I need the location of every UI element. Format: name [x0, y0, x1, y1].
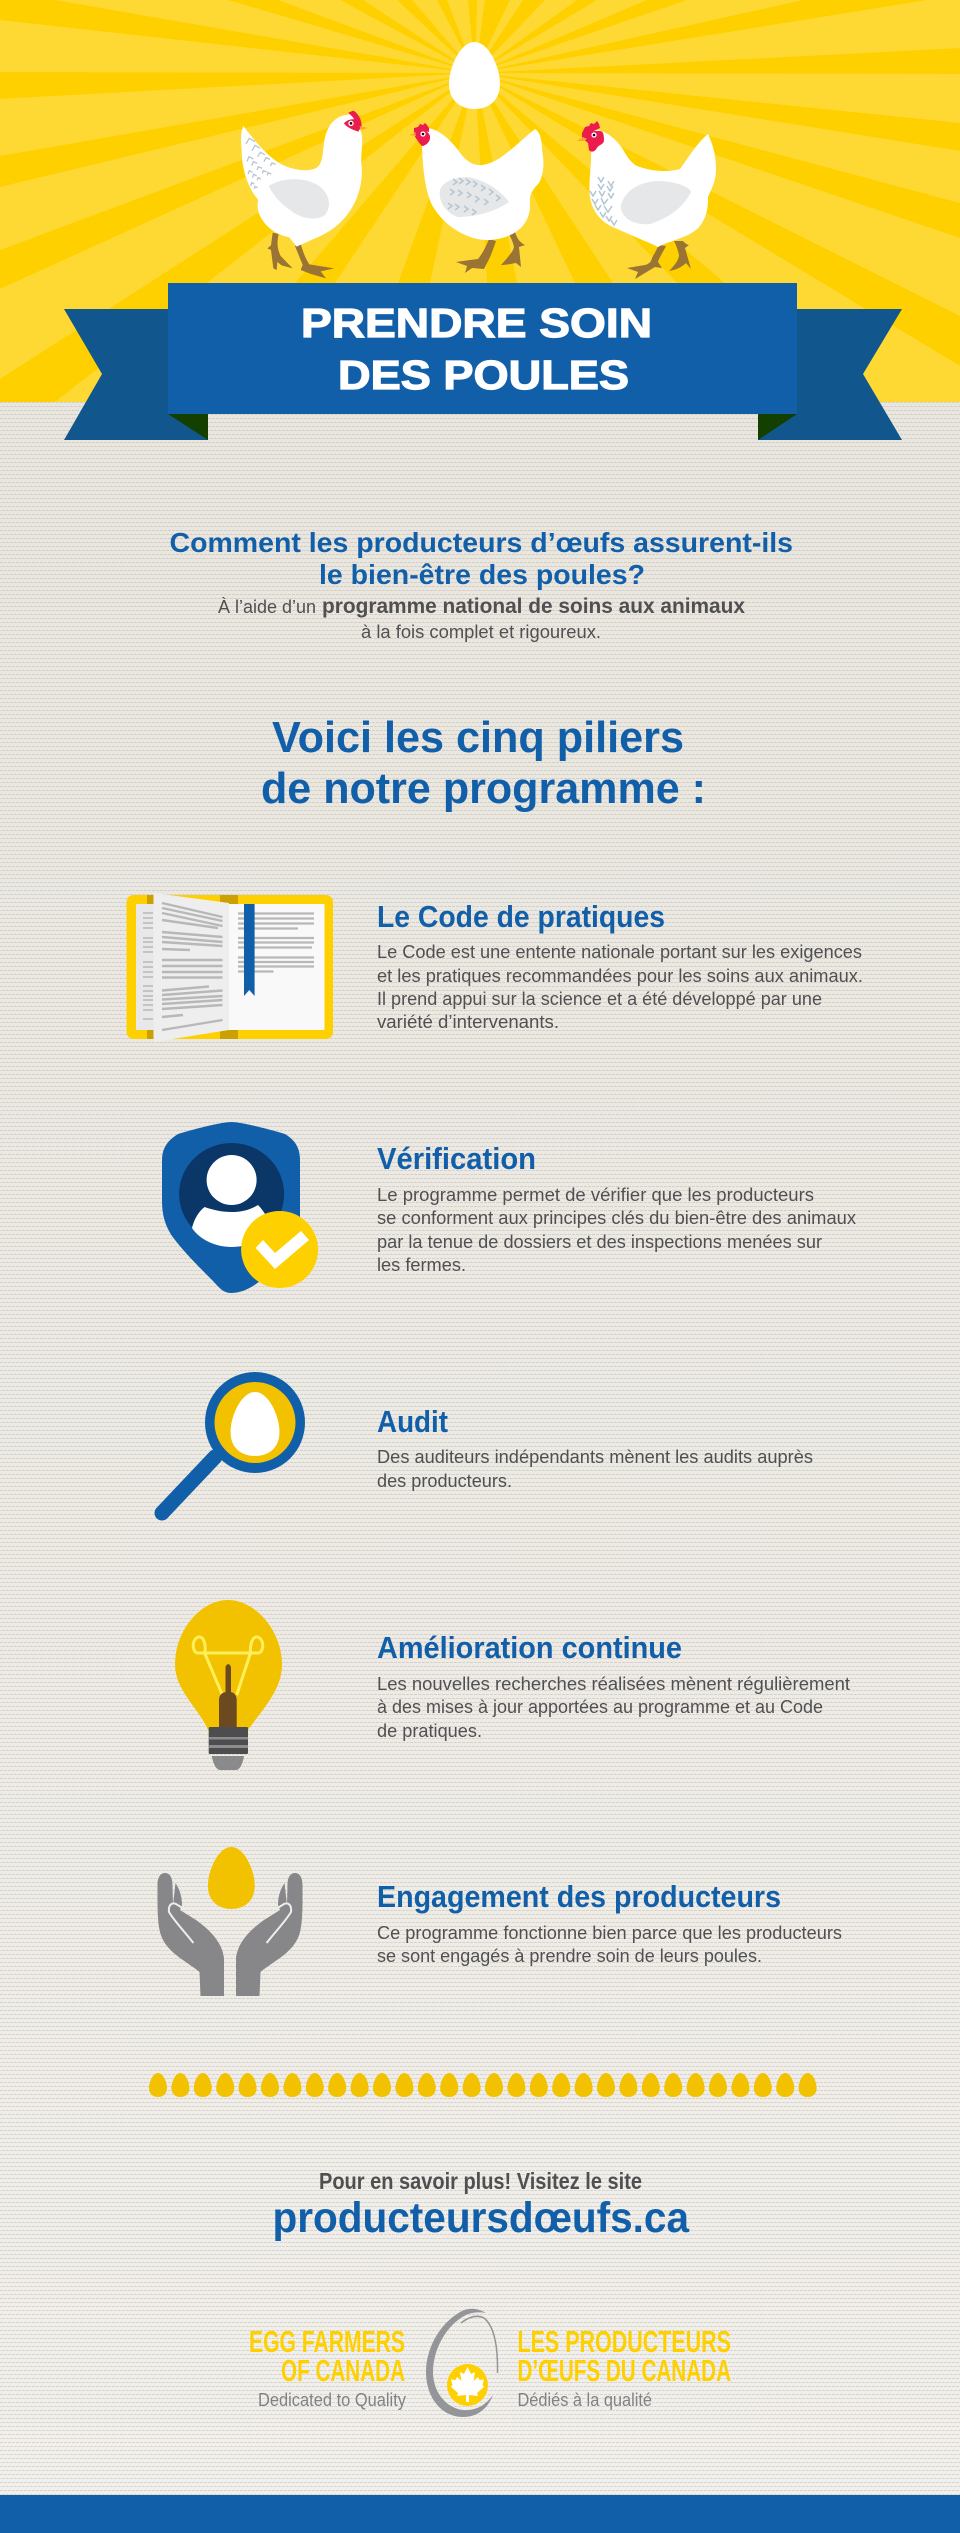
icon: magnifying glass [162, 1372, 305, 1513]
pillar 5 text [377, 1879, 842, 1966]
pillar 1 text: Le Code de pratiques [377, 899, 665, 934]
pillar 3 text: Des auditeurs indépendants mènent les audits auprès [377, 1446, 813, 1467]
pillar 2 text: se conforment aux principes clés du bien-être des animaux [377, 1207, 857, 1228]
call to action: Pour en savoir plus! Visitez le site [319, 2168, 642, 2194]
logo text: English [249, 2324, 407, 2410]
illustration: hen centre [409, 123, 543, 273]
heading: five pillars: de notre programme : [261, 764, 706, 813]
logo text: French: Dédiés à la qualité [518, 2389, 652, 2410]
pillar 4 text: Amélioration continue [377, 1630, 682, 1665]
title: DES POULES [338, 352, 629, 398]
intro answer: à la fois complet et rigoureux. [361, 622, 601, 642]
icon: light bulb [175, 1600, 282, 1770]
intro answer: À l’aide d’un [218, 596, 316, 617]
title: PRENDRE SOIN [301, 300, 652, 346]
pillar 3 text [377, 1404, 813, 1491]
pillar 4 text: Les nouvelles recherches réalisées mènent régulièrement [377, 1673, 850, 1694]
pillar 1 text: variété d’intervenants. [377, 1011, 559, 1032]
heading: five pillars: Voici les cinq piliers [272, 713, 684, 762]
intro question: le bien-être des poules? [319, 559, 645, 590]
pillar 2 text [377, 1141, 857, 1275]
pillar 5 text: se sont engagés à prendre soin de leurs poules. [377, 1945, 762, 1966]
row of yellow eggs [149, 2073, 817, 2097]
icon: open book [126, 893, 333, 1042]
pillar 4 text: de pratiques. [377, 1720, 482, 1741]
pillar 2 text: Le programme permet de vérifier que les producteurs [377, 1184, 814, 1205]
logo: egg with maple leaf [426, 2309, 498, 2417]
intro question: Comment les producteurs d’œufs assurent-ils [170, 527, 793, 558]
icon: hands holding egg [157, 1847, 303, 1996]
heading: five pillars [261, 713, 706, 813]
icon: white egg in sunburst [449, 42, 500, 109]
pillar 1 text: et les pratiques recommandées pour les soins aux animaux. [377, 965, 863, 986]
pillar 2 text: Vérification [377, 1141, 536, 1176]
pillar 3 text: des producteurs. [377, 1470, 512, 1491]
pillar 5 text: Ce programme fonctionne bien parce que les producteurs [377, 1922, 842, 1943]
pillar 3 text: Audit [377, 1404, 448, 1439]
pillar 4 text: à des mises à jour apportées au programme et au Code [377, 1696, 823, 1717]
call to action: producteursdœufs.ca [272, 2194, 690, 2242]
title [301, 300, 652, 398]
logo text: English: Dedicated to Quality [258, 2389, 407, 2410]
pillar 1 text: Le Code est une entente nationale portant sur les exigences [377, 941, 862, 962]
pillar 1 text [377, 899, 863, 1032]
logo text: French [518, 2324, 731, 2410]
footer band [0, 2495, 960, 2533]
illustration: hen right [577, 121, 716, 279]
pillar 2 text: par la tenue de dossiers et des inspections menées sur [377, 1231, 822, 1252]
illustration: hen left [241, 111, 368, 278]
call to action [272, 2168, 690, 2242]
pillar 1 text: Il prend appui sur la science et a été développé par une [377, 988, 822, 1009]
icon: verification shield [162, 1122, 318, 1293]
logo text: English: EGG FARMERS [249, 2324, 405, 2359]
intro answer [218, 595, 745, 642]
logo text: French: D’ŒUFS DU CANADA [518, 2353, 731, 2388]
logo text: English: OF CANADA [281, 2353, 405, 2388]
logo text: French: LES PRODUCTEURS [518, 2324, 731, 2359]
pillar 2 text: les fermes. [377, 1254, 466, 1275]
header sunburst [0, 0, 960, 402]
pillar 5 text: Engagement des producteurs [377, 1879, 781, 1914]
banner ribbon [64, 283, 902, 440]
intro answer: programme national de soins aux animaux [322, 595, 745, 618]
intro question [170, 527, 793, 590]
pillar 4 text [377, 1630, 850, 1741]
